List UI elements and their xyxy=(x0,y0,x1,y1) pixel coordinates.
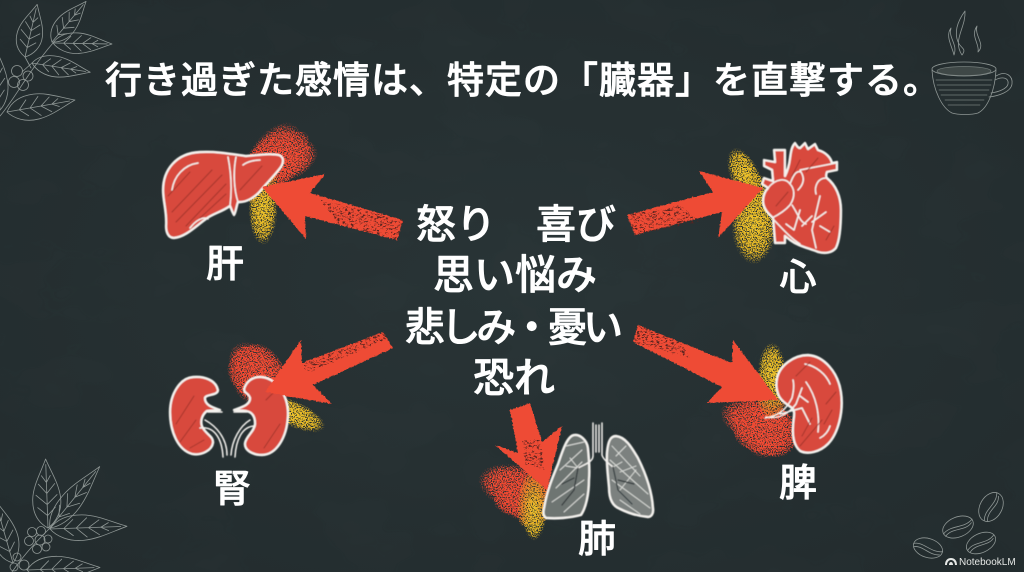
emotion: worry: 思い悩み xyxy=(433,252,597,298)
organ: heart xyxy=(762,143,841,253)
decoration: coffee branch top left xyxy=(0,0,112,124)
label: spleen: 脾 xyxy=(779,463,817,505)
label: heart: 心 xyxy=(780,257,816,298)
decoration: coffee beans xyxy=(911,488,1008,562)
emotion: anger and joy: 怒り 喜び xyxy=(416,203,616,247)
label: lung: 肺 xyxy=(578,519,616,561)
spray: heart impact xyxy=(713,135,782,274)
arrow: worry to spleen xyxy=(633,325,778,403)
organ: liver xyxy=(163,152,283,238)
arrow: anger to liver xyxy=(262,174,403,240)
spray: kidney impact xyxy=(209,323,339,446)
decoration: coffee branch bottom left xyxy=(0,459,127,572)
organ: spleen xyxy=(765,355,842,453)
decoration: coffee cup xyxy=(932,11,1012,114)
center emotions text xyxy=(405,203,623,401)
organ: kidneys xyxy=(170,377,288,457)
arrow: joy to heart xyxy=(627,171,763,238)
arrow: fear to lungs xyxy=(495,403,562,490)
emotion: grief and sorrow: 悲しみ・憂い xyxy=(405,306,623,350)
arrow: grief to kidney xyxy=(265,332,393,404)
spray: spleen impact xyxy=(702,334,814,470)
organ: lungs xyxy=(543,423,653,518)
spray: lung impact xyxy=(462,448,574,548)
NotebookLM watermark: NotebookLM xyxy=(959,557,1016,568)
label: liver: 肝 xyxy=(206,244,244,286)
spray: liver impact xyxy=(220,101,333,254)
emotion: fear: 恐れ xyxy=(473,355,555,401)
label: kidney: 腎 xyxy=(213,469,251,511)
title: 行き過ぎた感情は、特定の「臓器」を直撃する。 xyxy=(105,60,941,101)
